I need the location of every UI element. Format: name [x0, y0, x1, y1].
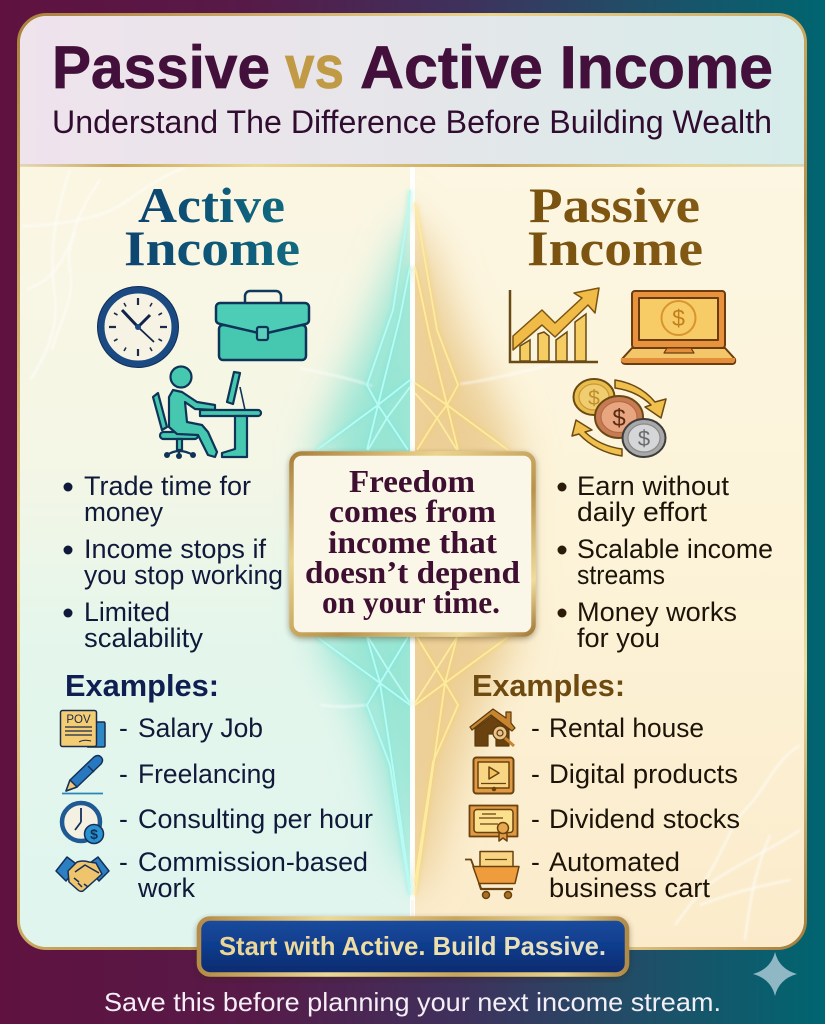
bullets: passive: for you	[577, 623, 660, 653]
bullets: active: Limited	[84, 597, 170, 627]
icon: cart	[465, 852, 519, 898]
icon: coins cycle	[572, 379, 666, 457]
heading: passive income: Passive	[529, 177, 700, 233]
heading: examples passive: Examples:	[472, 668, 625, 703]
icon: salary document	[60, 710, 105, 747]
example text: automated business cart: business cart	[549, 873, 711, 903]
example text: freelancing: -	[119, 759, 128, 789]
icon: sparkle	[753, 952, 797, 996]
example text: automated business cart	[531, 847, 711, 903]
example text: rental house: -	[531, 713, 540, 743]
cta button	[199, 918, 627, 974]
icon: clock	[98, 286, 178, 368]
icon: certificate	[470, 806, 518, 841]
energy lines: gold	[415, 203, 508, 895]
example text: freelancing: Freelancing	[138, 759, 276, 789]
heading: passive income: Income	[527, 220, 703, 276]
heading: active income: Active	[138, 177, 285, 233]
bullets: active: scalability	[84, 623, 204, 653]
bullets: passive: daily effort	[577, 497, 708, 527]
subtitle: Understand The Difference Before Building Wealth	[52, 104, 772, 140]
bullets: passive: streams	[577, 560, 665, 590]
bullets: passive	[558, 471, 773, 653]
callout: freedom: comes from	[329, 493, 496, 529]
icon: video tablet	[474, 758, 514, 794]
callout: freedom: doesn’t depend	[305, 554, 520, 590]
example text: salary job: Salary Job	[138, 713, 263, 743]
example text: commission: work	[137, 873, 196, 903]
icon: laptop: $	[672, 305, 685, 331]
example text: automated business cart: -	[531, 847, 540, 877]
cta button: Start with Active. Build Passive.	[219, 931, 606, 961]
title: Passive	[52, 34, 270, 101]
center divider	[410, 166, 415, 947]
icon: laptop	[621, 291, 735, 364]
bullets: passive: Earn without	[577, 471, 730, 501]
example text: rental house: Rental house	[549, 713, 704, 743]
icon: growth chart	[510, 288, 599, 362]
icon: person at desk	[153, 366, 261, 459]
icon: pen	[62, 756, 103, 794]
heading: active income	[124, 177, 300, 276]
bullets: active	[64, 471, 283, 653]
bullets: active: you stop working	[84, 560, 283, 590]
example text: commission	[119, 847, 368, 903]
icon: coins cycle: $	[612, 405, 626, 432]
example text: consulting: Consulting per hour	[138, 804, 373, 834]
icon: coins cycle: $	[638, 426, 650, 451]
title: vs	[285, 34, 344, 101]
callout: freedom: income that	[328, 524, 497, 560]
icon: clock with coin: $	[90, 826, 98, 842]
callout: freedom: on your time.	[322, 584, 500, 620]
heading: examples active: Examples:	[65, 668, 219, 703]
heading: passive income	[527, 177, 703, 276]
header divider	[20, 164, 804, 167]
example text: automated business cart: Automated	[549, 847, 680, 877]
example text: digital products: Digital products	[549, 759, 738, 789]
example text: commission: -	[119, 847, 128, 877]
energy lines: teal	[317, 190, 410, 895]
panel: active background	[20, 166, 440, 947]
icon: briefcase	[216, 291, 309, 360]
title: Active Income	[360, 34, 773, 101]
bullets: active: Income stops if	[84, 534, 267, 564]
icon: handshake	[56, 857, 109, 891]
heading: active income: Income	[124, 220, 300, 276]
callout: freedom	[292, 454, 534, 634]
bullets: active: money	[84, 497, 164, 527]
example text: dividend stocks: Dividend stocks	[549, 804, 740, 834]
bullets: active: Trade time for	[84, 471, 251, 501]
example text: consulting: -	[119, 804, 128, 834]
panel: passive background	[415, 212, 804, 947]
bullets: passive: Money works	[577, 597, 737, 627]
bullets: passive: Scalable income	[577, 534, 773, 564]
icon: house	[470, 709, 515, 746]
footer text: Save this before planning your next income stream.	[104, 987, 721, 1017]
example text: dividend stocks: -	[531, 804, 540, 834]
example text: salary job: -	[119, 713, 128, 743]
example text: commission: Commission-based	[138, 847, 368, 877]
callout: freedom: Freedom	[349, 463, 475, 499]
icon: clock with coin	[62, 803, 104, 844]
icon: coins cycle: $	[588, 387, 600, 410]
icon: salary document: POV	[66, 714, 91, 726]
example text: digital products: -	[531, 759, 540, 789]
